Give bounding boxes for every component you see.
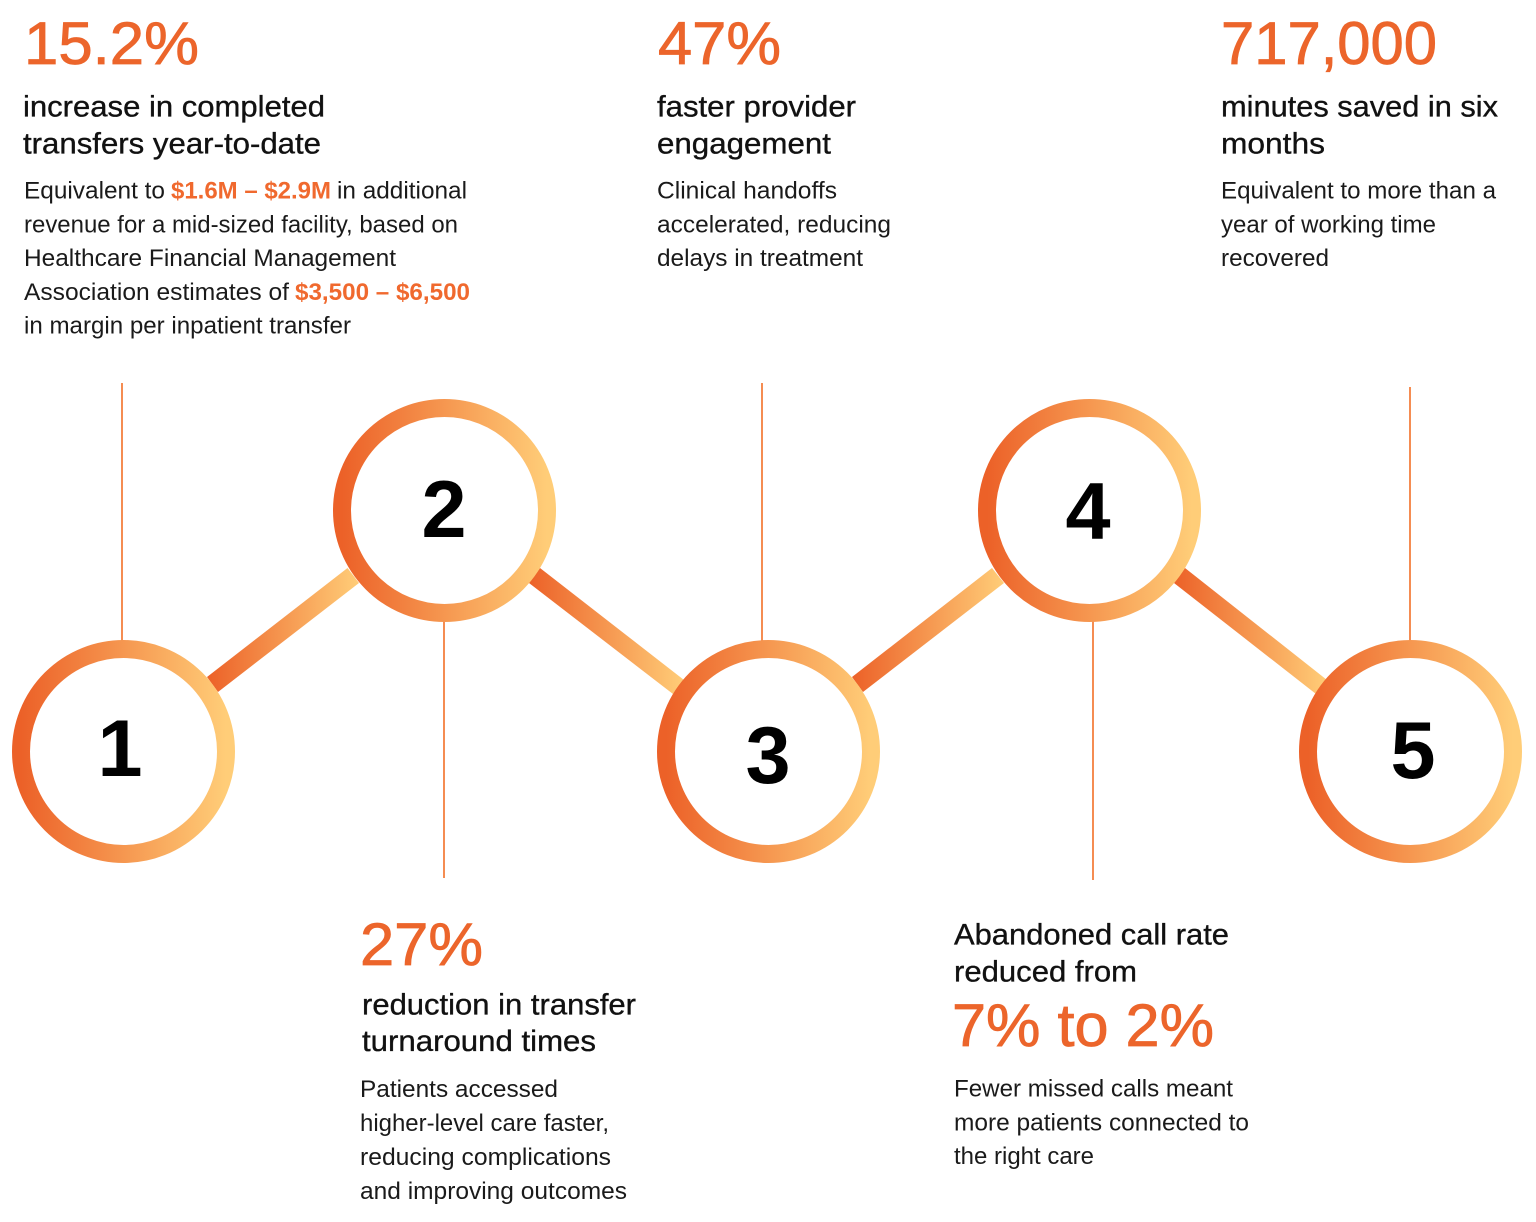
description: step 5: recovered [1221, 245, 1329, 272]
heading: step 2: reduction in transfer [362, 988, 636, 1022]
connector: circle 2 to 3 [529, 568, 684, 694]
stat: 7% to 2%: 7% to 2% [952, 992, 1214, 1059]
stem line 1 [121, 383, 123, 642]
heading: step 1: increase in completed [23, 90, 325, 124]
heading: step 5: minutes saved in six [1221, 90, 1498, 124]
heading: step 3: engagement [657, 128, 832, 160]
description: step 4 [954, 1076, 1249, 1170]
description: step 1: $3,500 – $6,500 [295, 279, 470, 306]
description: step 1: Association estimates of [24, 279, 289, 306]
heading: step 4 [954, 918, 1229, 988]
description: step 1: revenue for a mid-sized facility, based on [24, 212, 458, 238]
description: step 3 [657, 178, 891, 272]
stat: 15.2%: 15.2% [24, 10, 199, 77]
step circle 5 [1308, 649, 1513, 854]
heading: step 4: Abandoned call rate [954, 918, 1229, 952]
description: step 2: and improving outcomes [360, 1178, 627, 1205]
description: step 5: Equivalent to more than a [1221, 178, 1497, 204]
description: step 3: delays in treatment [657, 245, 863, 272]
step circle 1: 1 [97, 704, 143, 794]
step circle 1 [21, 649, 226, 854]
description: step 1: Healthcare Financial Management [24, 245, 396, 272]
stem line 5 [1409, 387, 1411, 642]
heading: step 2: turnaround times [362, 1025, 596, 1058]
step circle 5: 5 [1390, 706, 1436, 796]
description: step 3: Clinical handoffs [657, 178, 837, 204]
step circle 4: 4 [1065, 467, 1111, 557]
step circle 2 [342, 408, 547, 613]
heading: step 3 [657, 90, 856, 160]
description: step 1: $1.6M – $2.9M [171, 178, 331, 204]
description: step 5: year of working time [1221, 212, 1436, 238]
description: step 2 [360, 1076, 627, 1205]
heading: step 2 [362, 988, 636, 1058]
description: step 2: reducing complications [360, 1144, 611, 1171]
connector: circle 1 to 2 [207, 568, 359, 692]
stat: 47%: 47% [658, 10, 781, 77]
step circle 2: 2 [421, 465, 467, 555]
step circle 3 [666, 649, 871, 854]
description: step 4: the right care [954, 1143, 1094, 1170]
heading: step 5: months [1221, 128, 1325, 160]
heading: step 5 [1221, 90, 1498, 160]
description: step 1: Equivalent to [24, 178, 165, 204]
stat: 717,000: 717,000 [1221, 10, 1437, 77]
stem line 2 [443, 620, 445, 878]
text block: step 2 [360, 911, 636, 1205]
step circle 4 [987, 408, 1192, 613]
heading: step 1 [23, 90, 325, 160]
stem line 4 [1092, 620, 1094, 880]
heading: step 3: faster provider [657, 90, 856, 124]
description: step 3: accelerated, reducing [657, 212, 891, 238]
step circle 3: 3 [745, 711, 791, 801]
text block: step 1 [23, 10, 470, 340]
stat: 27%: 27% [360, 911, 483, 978]
description: step 1 [24, 178, 470, 340]
connector: circle 4 to 5 [1174, 568, 1327, 694]
description: step 2: Patients accessed [360, 1076, 558, 1103]
description: step 4: Fewer missed calls meant [954, 1076, 1233, 1102]
description: step 4: more patients connected to [954, 1110, 1249, 1136]
description: step 2: higher-level care faster, [360, 1110, 609, 1137]
heading: step 1: transfers year-to-date [23, 128, 321, 160]
description: step 1: in margin per inpatient transfer [24, 312, 351, 340]
description: step 1: in additional [337, 178, 467, 204]
text block: step 5 [1221, 10, 1498, 272]
connector: circle 3 to 4 [852, 568, 1004, 692]
description: step 5 [1221, 178, 1497, 272]
heading: step 4: reduced from [954, 956, 1137, 988]
stem line 3 [761, 383, 763, 642]
text block: step 3 [657, 10, 891, 272]
text block: step 4 [952, 918, 1249, 1170]
